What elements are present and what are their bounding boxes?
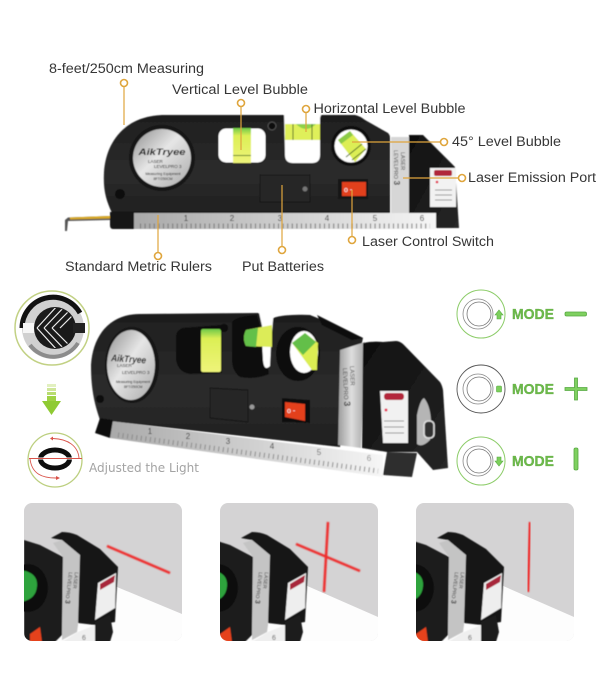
ruler: 3 <box>226 437 231 446</box>
device: 6 <box>82 635 86 642</box>
symbol: vertical line <box>574 448 578 470</box>
brand label: AikTryee <box>110 353 147 366</box>
device <box>416 531 505 641</box>
brand label: Measuring Equipment <box>146 172 180 176</box>
45 degree bubble window <box>331 126 371 166</box>
silver band <box>391 137 409 213</box>
laser switch <box>282 398 310 423</box>
vertical bubble window <box>176 325 222 374</box>
mode panel: cross <box>457 365 587 413</box>
mode panel: minus <box>457 290 586 338</box>
horizontal bubble window <box>232 308 275 378</box>
horizontal bubble window <box>284 112 322 163</box>
label: Standard Metric Rulers <box>65 215 212 274</box>
brand label: LEVELPRO 3 <box>122 370 150 375</box>
left foot <box>110 212 134 229</box>
brand label: AikTryee <box>137 147 186 158</box>
callouts and labels: top diagram <box>49 61 596 274</box>
ruler: 5 <box>317 448 322 457</box>
device: 6 <box>272 635 276 642</box>
vertical bubble window <box>218 128 266 163</box>
screw hole <box>115 189 125 199</box>
label: Horizontal Level Bubble: Horizontal Level Bubble <box>314 101 466 116</box>
caption: Adjusted the Light: Adjusted the Light <box>89 460 199 475</box>
ruler <box>110 421 383 477</box>
device: LASER <box>261 572 269 589</box>
device: LASER <box>457 572 465 589</box>
brand label: 8FT/250CM <box>124 385 143 389</box>
device: LEVELPRO 3 <box>63 572 74 604</box>
dial icon: arrow down <box>457 437 505 485</box>
metric ruler: 1 <box>184 214 189 223</box>
silver band: LEVELPRO 3 <box>392 150 401 186</box>
left foot <box>95 418 113 438</box>
metric ruler: 3 <box>278 214 283 223</box>
tape hook <box>65 216 110 231</box>
label: 45 degree Level Bubble: 45° Level Bubble <box>452 134 561 149</box>
silver band: LASER <box>348 366 355 386</box>
45 degree bubble window <box>276 327 320 381</box>
laser line <box>107 546 170 573</box>
adjustment dial close-up <box>15 291 89 365</box>
symbol: horizontal line <box>565 312 586 316</box>
battery door <box>260 175 310 202</box>
label: 8-feet/250cm Measuring <box>49 61 204 125</box>
ruler: 1 <box>148 427 153 436</box>
label: Laser Control Switch <box>348 190 494 249</box>
brand label <box>129 125 195 191</box>
mode panel: minus: MODE <box>512 306 554 323</box>
product diagram: top laser level <box>65 112 459 231</box>
label: Put Batteries: Put Batteries <box>242 259 324 274</box>
photo: vertical line mode <box>416 503 574 641</box>
metric ruler: 6 <box>420 214 425 223</box>
warning sticker <box>430 168 456 207</box>
top strap <box>317 315 363 340</box>
body <box>104 115 390 213</box>
ruler: 2 <box>186 432 191 441</box>
brand label: LASER <box>117 363 133 368</box>
product photo: angled laser level <box>91 308 448 477</box>
silver band: LASER <box>399 152 405 170</box>
brand label: Measuring Equipment <box>116 380 150 384</box>
brand label: 8FT/250CM <box>154 177 172 181</box>
label: 45 degree Level Bubble <box>352 134 561 149</box>
label: Laser Emission Port <box>403 170 596 185</box>
brand label: LASER <box>148 159 164 164</box>
rear block <box>362 341 448 470</box>
laser switch <box>338 179 368 199</box>
arrow: green down <box>42 384 61 415</box>
device: LEVELPRO 3 <box>253 572 264 604</box>
metric ruler: 4 <box>325 214 330 223</box>
label: Laser Emission Port: Laser Emission Port <box>468 170 596 185</box>
label: Horizontal Level Bubble <box>302 101 466 132</box>
mode panel: vertical <box>457 437 578 485</box>
photo: horizontal line mode <box>8 503 182 642</box>
laser cross <box>296 522 360 592</box>
rear block <box>409 135 459 228</box>
label: Standard Metric Rulers: Standard Metric Rulers <box>65 259 212 274</box>
device <box>220 531 309 641</box>
laser line <box>528 522 530 592</box>
laser switch: o - <box>287 408 296 415</box>
dial icon: arrow up <box>457 290 505 338</box>
device: 6 <box>468 635 472 642</box>
label: Vertical Level Bubble: Vertical Level Bubble <box>172 82 308 97</box>
ruler: 6 <box>367 454 372 463</box>
mode panel: cross: MODE <box>512 381 554 398</box>
photo: cross line mode <box>220 503 378 641</box>
laser emission port <box>417 398 434 445</box>
metric ruler: 5 <box>373 214 378 223</box>
device <box>24 531 119 641</box>
mode panel: vertical: MODE <box>512 453 554 470</box>
device: LEVELPRO 3 <box>449 572 460 604</box>
label: Vertical Level Bubble <box>172 82 308 150</box>
adjusted light dial <box>28 433 82 487</box>
body <box>91 313 363 447</box>
ruler: 4 <box>270 442 275 451</box>
brand label <box>105 327 159 403</box>
warning sticker <box>380 391 408 443</box>
brand label: LEVELPRO 3 <box>154 164 182 169</box>
metric ruler <box>134 213 436 229</box>
laser switch: o - <box>344 187 353 194</box>
symbol: cross <box>565 378 587 400</box>
label: Laser Control Switch: Laser Control Switch <box>362 234 494 249</box>
metric ruler: 2 <box>230 214 235 223</box>
label: Put Batteries <box>242 185 324 274</box>
dial icon: dot <box>457 365 505 413</box>
front foot <box>383 452 417 477</box>
silver band <box>338 342 365 448</box>
battery door <box>210 388 254 422</box>
label: 8-feet/250cm Measuring: 8-feet/250cm Measuring <box>49 61 204 76</box>
silver band: LEVELPRO 3 <box>341 368 352 406</box>
device: LASER <box>71 572 79 589</box>
